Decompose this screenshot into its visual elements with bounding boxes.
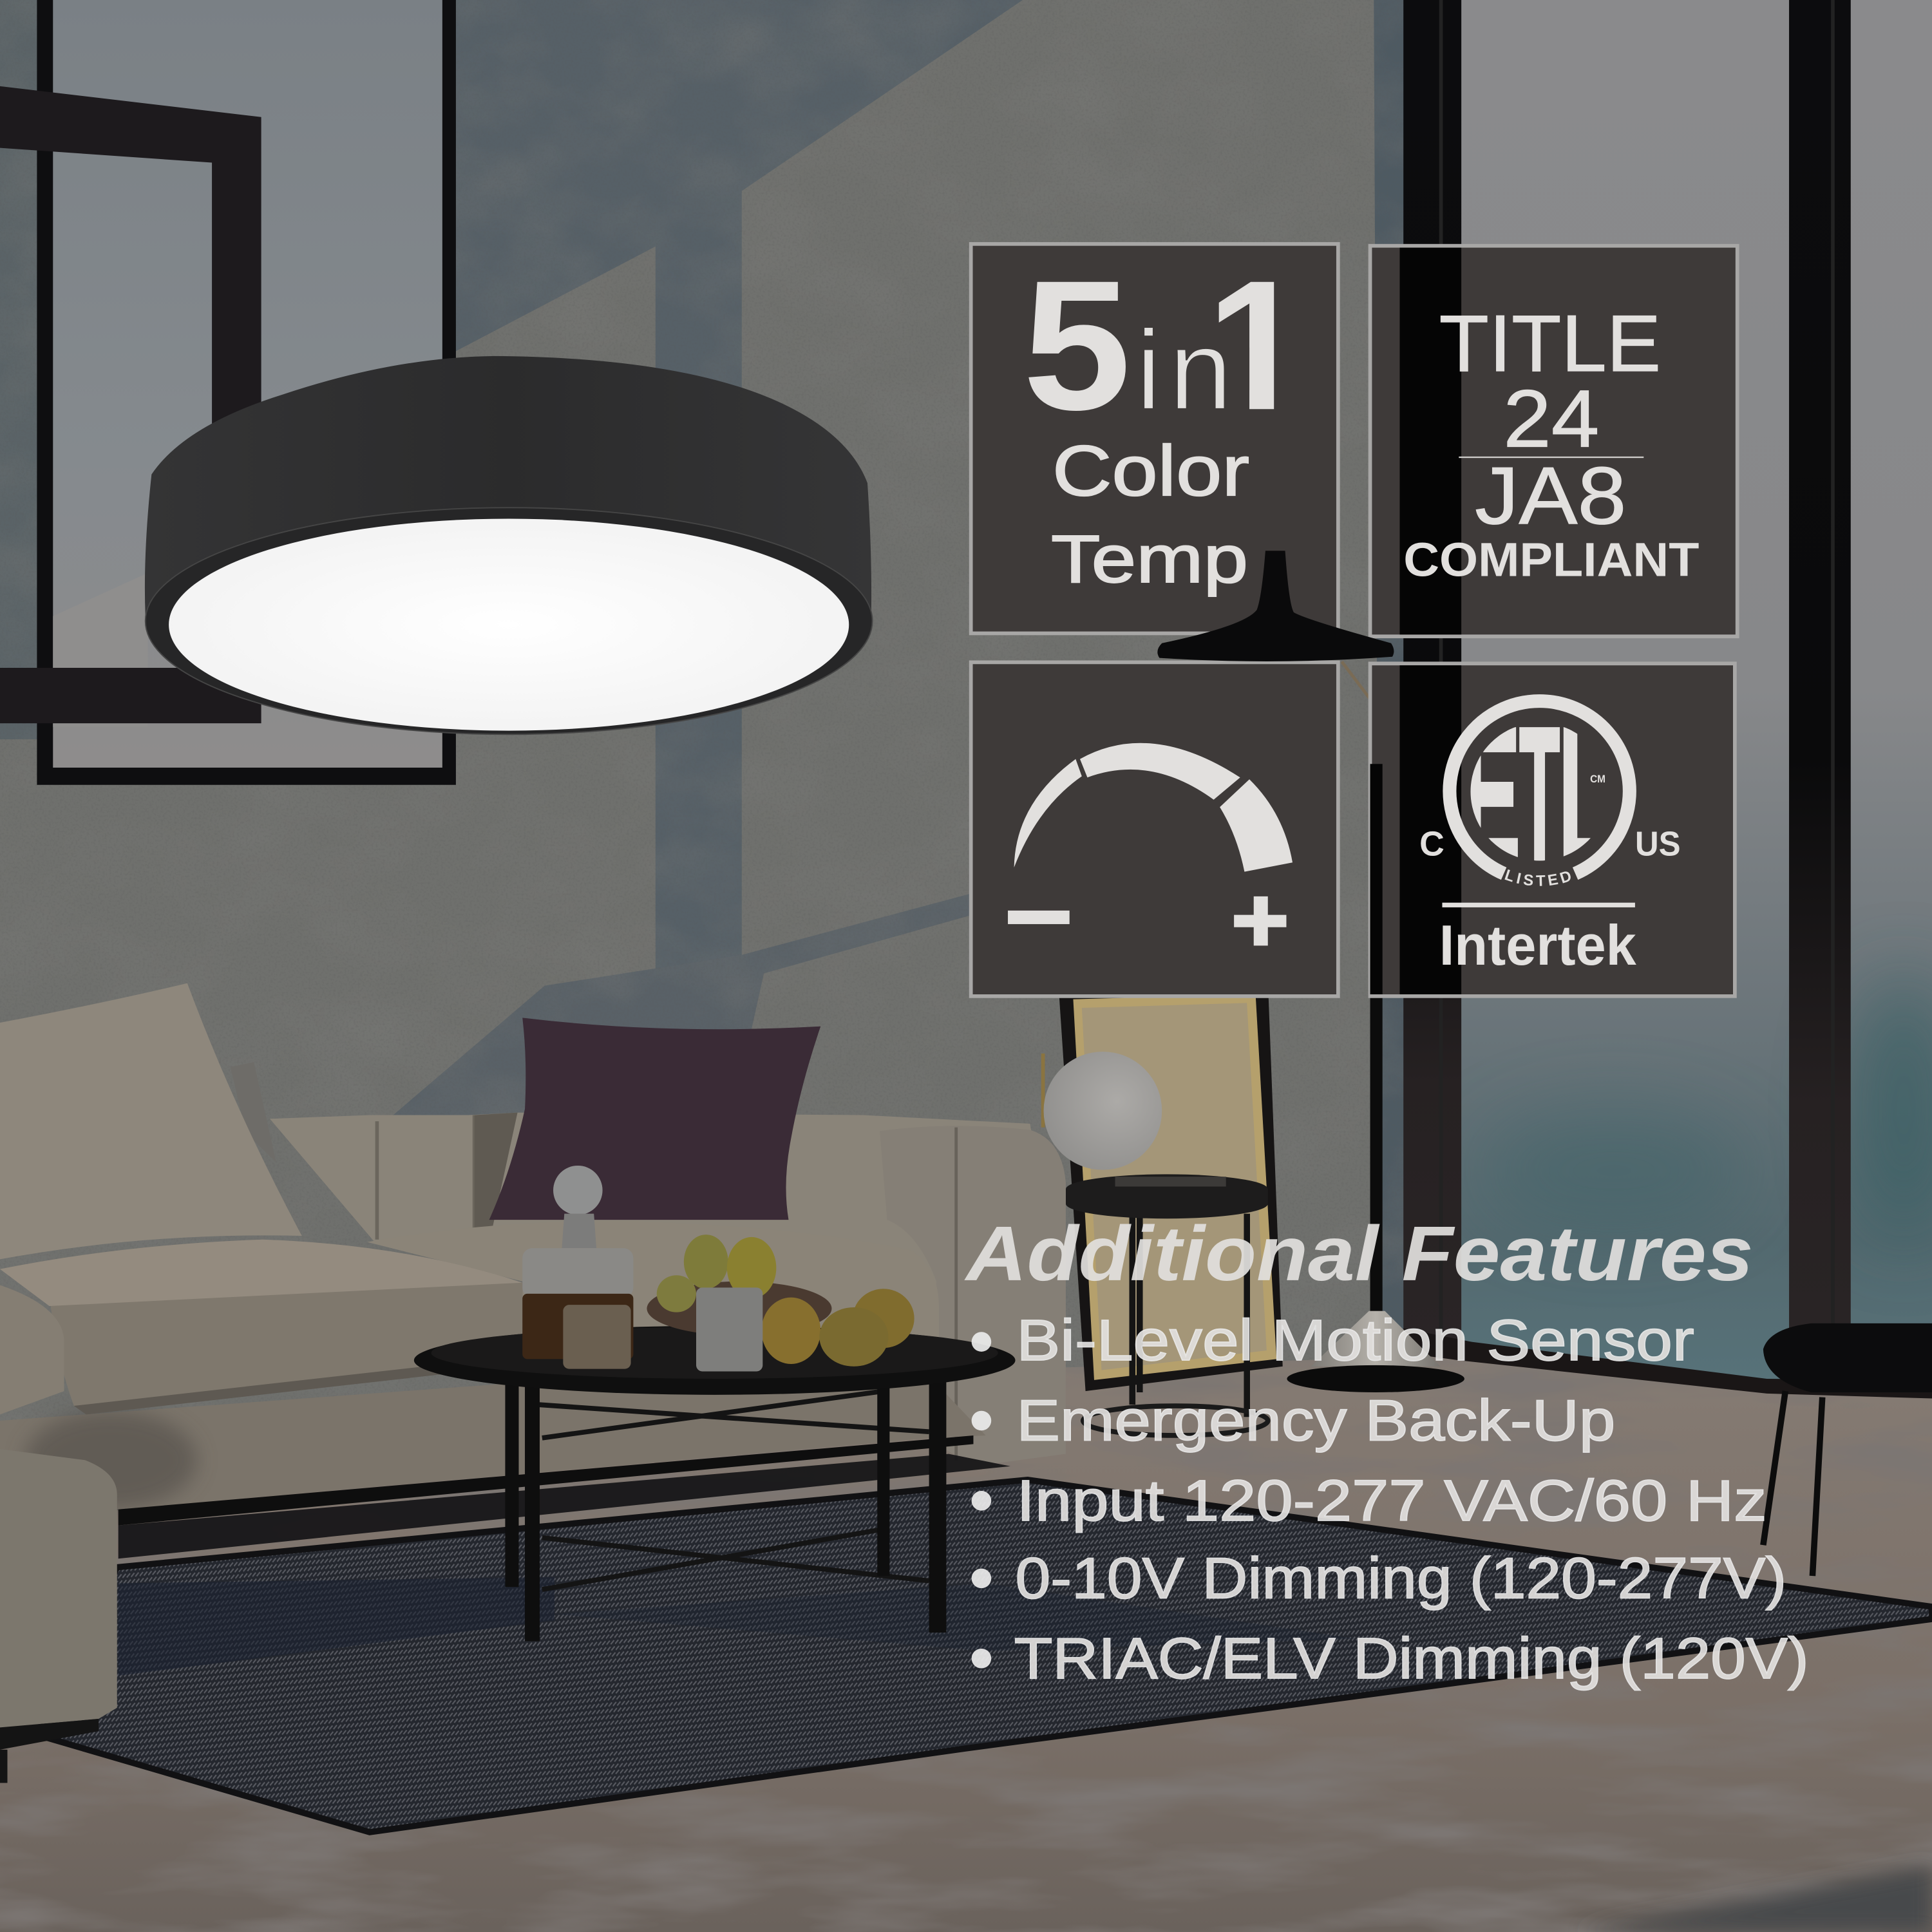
fixture body <box>145 356 871 727</box>
leaning canvas <box>1058 981 1283 1391</box>
rug <box>37 1480 1932 1832</box>
word color: Color <box>1052 431 1249 511</box>
icon: dimming arc <box>1014 743 1293 872</box>
globe lamp <box>1041 1052 1162 1170</box>
intertek text: Intertek <box>1439 913 1637 977</box>
coffee table <box>414 1326 1016 1641</box>
logo letters: T <box>1519 688 1560 902</box>
icon: minus <box>1008 911 1070 924</box>
title text: TITLE <box>1439 299 1661 388</box>
etl logo: L <box>1558 688 1611 902</box>
feature 4: 0-10V Dimming (120-277V) <box>1016 1547 1786 1611</box>
black stool <box>1763 1323 1932 1576</box>
fixture rim <box>146 507 873 734</box>
logo letters: E <box>1461 688 1520 902</box>
number 24: 24 <box>1503 374 1599 464</box>
feature 1: Bi-Level Motion Sensor <box>1016 1309 1694 1373</box>
framed picture on wall <box>37 0 456 785</box>
window frame behind panel <box>1399 248 1461 634</box>
pendant lamp shade over panels <box>1157 551 1394 661</box>
listed text: LISTED <box>1504 869 1571 886</box>
additional features list <box>964 1210 1809 1691</box>
panel: etl listed intertek <box>1368 661 1737 998</box>
panel: title 24 ja8 compliant <box>1370 246 1738 636</box>
whisky decanter and glasses <box>522 1166 762 1371</box>
ja8 text: JA8 <box>1475 450 1627 541</box>
us mark: US <box>1635 825 1681 863</box>
ottoman <box>0 1449 117 1783</box>
window frame and lamp pole behind panel <box>1370 665 1461 994</box>
feature 3: Input 120-277 VAC/60 Hz <box>1016 1469 1767 1533</box>
windows <box>1461 0 1932 1380</box>
ceiling light fixture <box>145 356 873 734</box>
feature 5: TRIAC/ELV Dimming (120V) <box>1014 1627 1809 1691</box>
window sill <box>1403 1328 1932 1399</box>
compliant text: COMPLIANT <box>1403 532 1699 586</box>
word temp: Temp <box>1051 522 1248 597</box>
panel: dimming gauge <box>971 662 1338 996</box>
cm mark: CM <box>1590 773 1605 785</box>
fruit bowl <box>647 1235 914 1367</box>
feature 2: Emergency Back-Up <box>1016 1389 1615 1454</box>
word in: in <box>1136 307 1232 433</box>
dark wooden frame <box>0 86 261 723</box>
big number 1: 1 <box>1206 242 1309 448</box>
panel: 5 in 1 color temp <box>971 242 1338 633</box>
floor lamp <box>1287 661 1464 1392</box>
heading: Additional Features <box>964 1210 1754 1297</box>
sofa <box>0 1062 1066 1558</box>
concrete wall <box>0 0 1479 1479</box>
window frames <box>1403 0 1851 1380</box>
floor <box>0 1356 1932 1932</box>
c mark: C <box>1419 825 1444 863</box>
icon: plus <box>1234 896 1286 945</box>
big number 5: 5 <box>1023 242 1131 448</box>
rule <box>1459 457 1643 458</box>
side table <box>1066 1174 1268 1435</box>
rule <box>1442 903 1635 907</box>
glowing diffuser <box>169 518 849 731</box>
beige pillow <box>0 983 302 1259</box>
purple pillow <box>489 1018 820 1220</box>
etl logo <box>1419 694 1681 886</box>
logo ring <box>1450 701 1629 874</box>
